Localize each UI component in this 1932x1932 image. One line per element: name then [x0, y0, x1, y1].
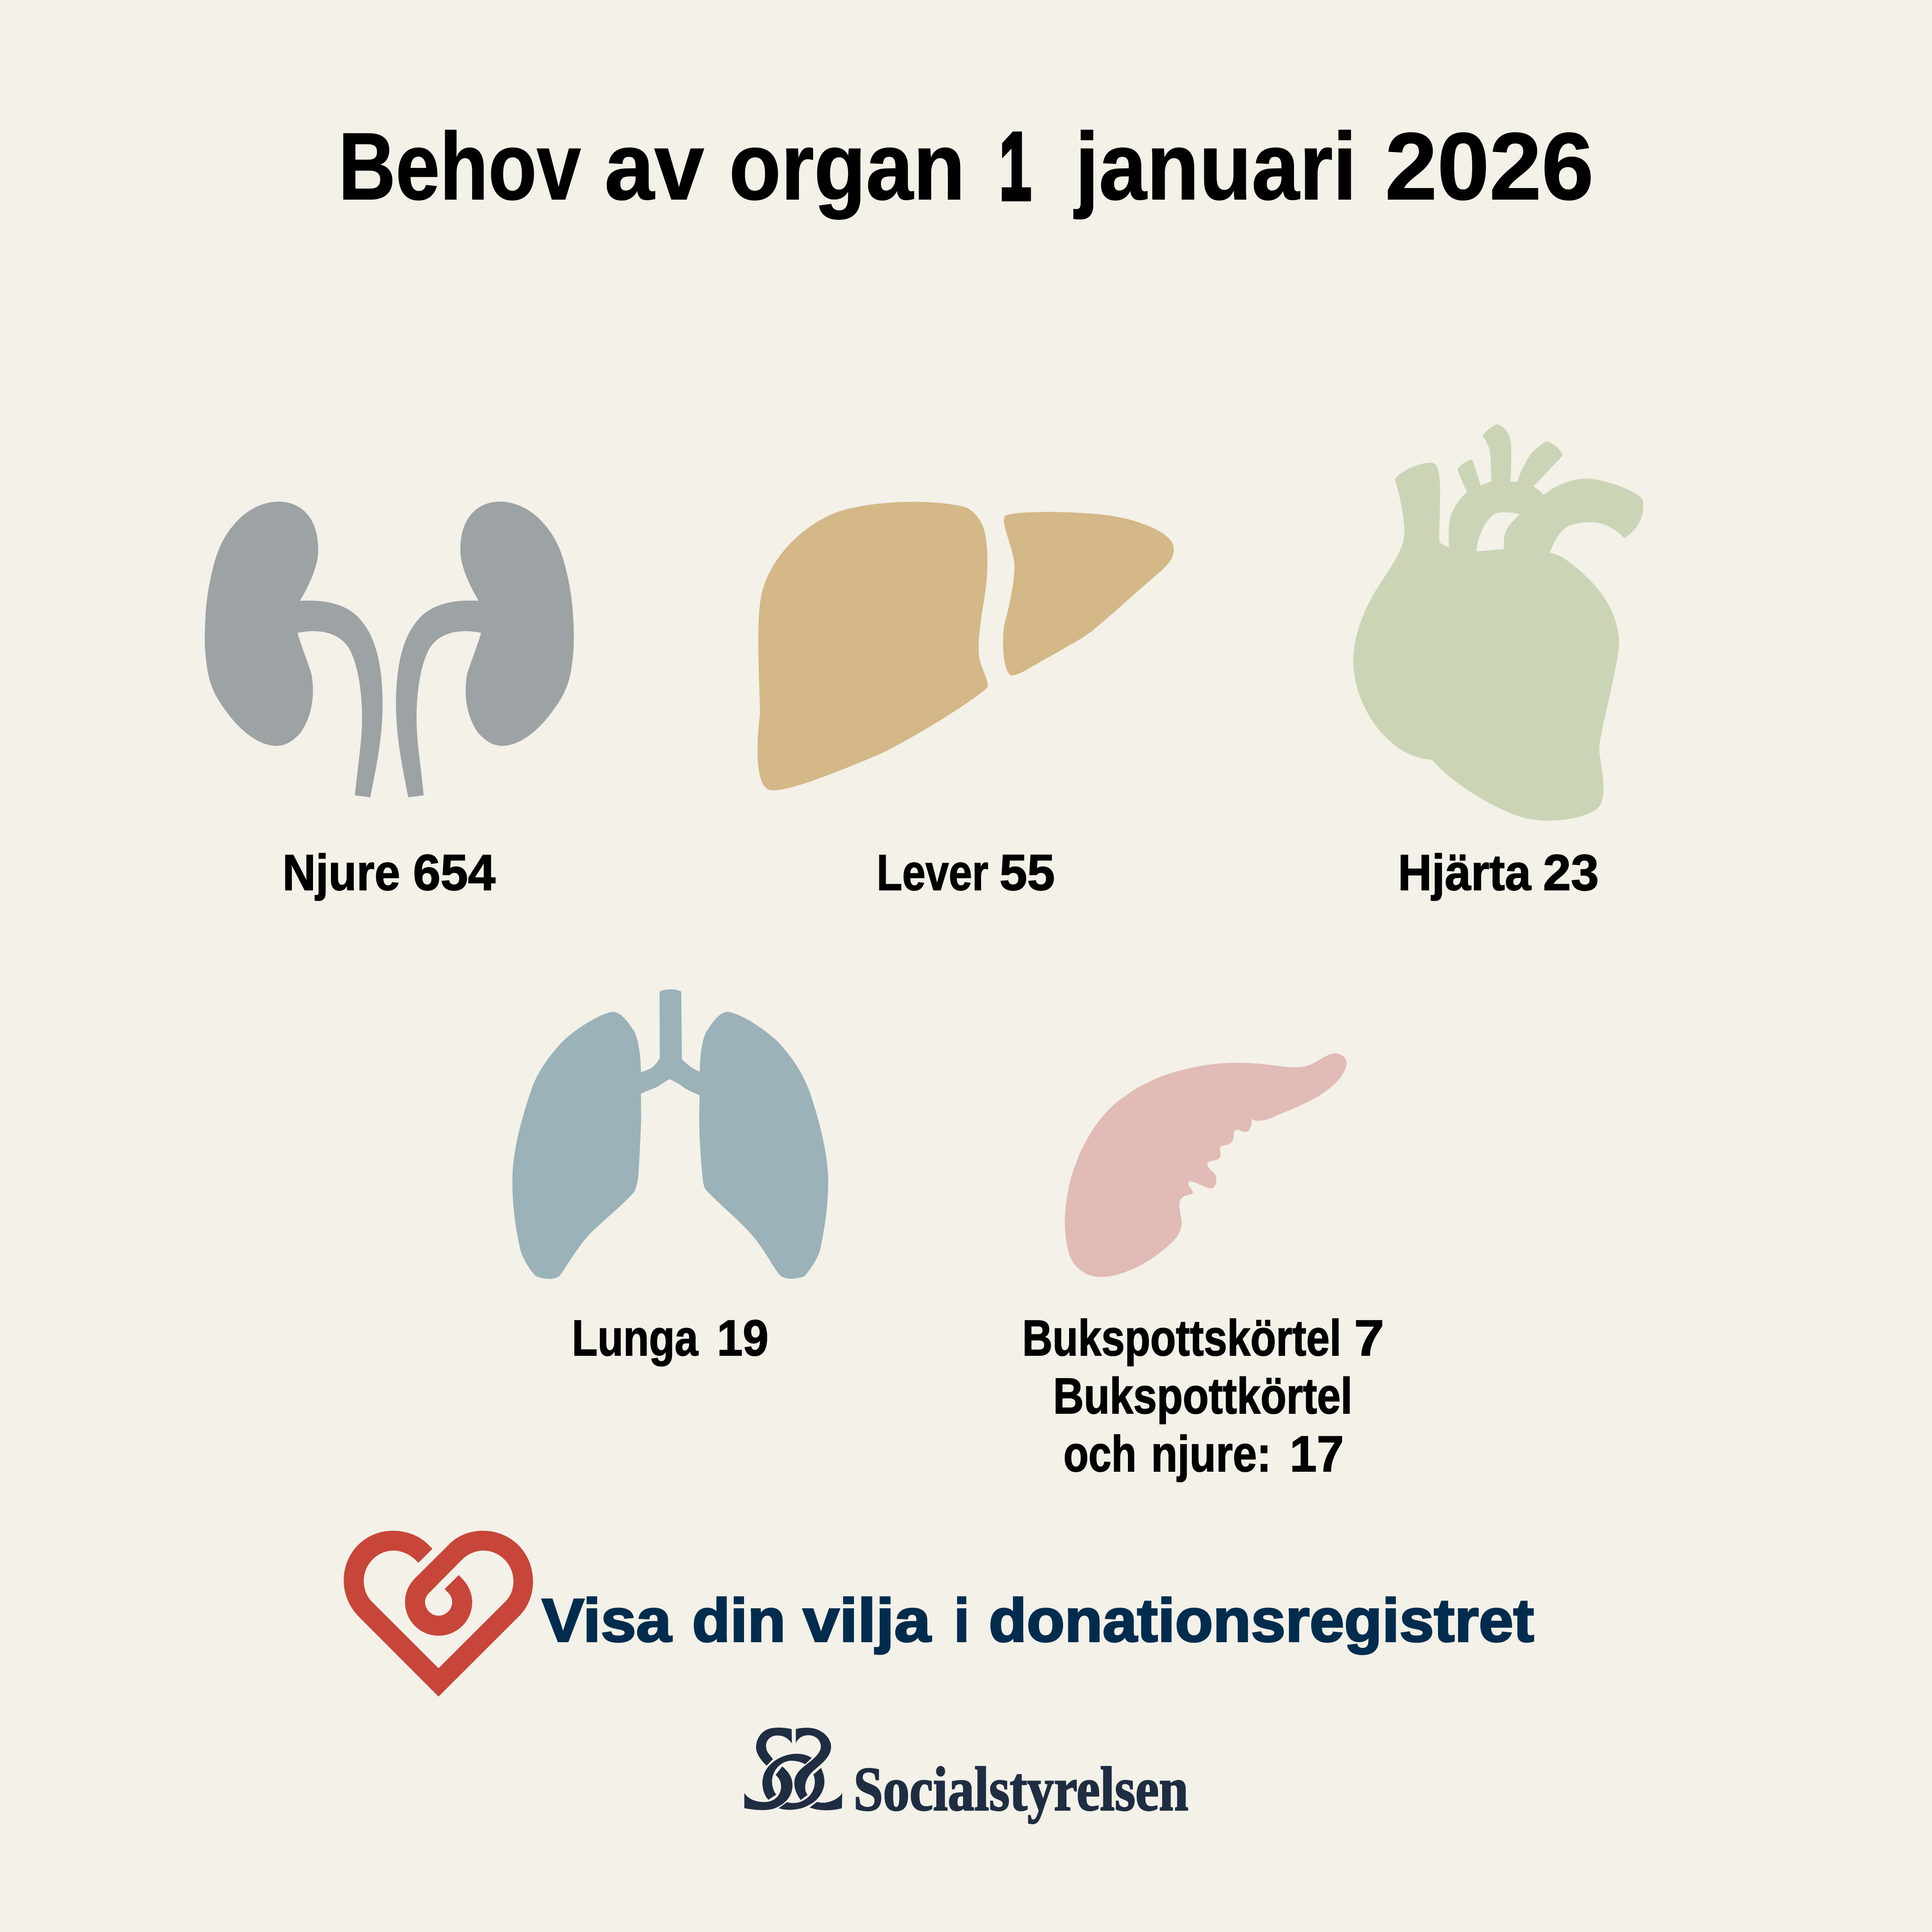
- title: organ: [729, 113, 965, 220]
- label: lung: Lunga: [572, 1310, 699, 1367]
- call to action: vilja: [803, 1586, 931, 1655]
- icon: heart organ: [1353, 424, 1643, 820]
- title: Behov: [338, 113, 581, 220]
- icon: kidneys: [205, 501, 574, 797]
- label: kidney: Njure: [283, 844, 400, 901]
- title: av: [605, 113, 704, 220]
- title: 2026: [1385, 113, 1594, 220]
- icon: Socialstyrelsen symbol: [744, 1728, 842, 1810]
- label: pancreas: och: [1063, 1426, 1136, 1482]
- label: liver: 55: [999, 844, 1055, 901]
- icon: pancreas: [1065, 1053, 1346, 1277]
- label: pancreas: Bukspottskörtel: [1022, 1310, 1341, 1367]
- label: pancreas: 17: [1290, 1426, 1344, 1482]
- label: pancreas: njure:: [1151, 1426, 1271, 1482]
- call to action: donationsregistret: [989, 1586, 1534, 1655]
- logo: Socialstyrelsen: [744, 1728, 1188, 1824]
- icon: lungs: [512, 989, 828, 1279]
- label: heart: 23: [1543, 844, 1599, 901]
- call to action: din: [692, 1586, 786, 1655]
- call to action: i: [954, 1586, 969, 1655]
- label: lung: 19: [717, 1310, 769, 1367]
- label: heart: Hjärta: [1398, 844, 1531, 901]
- label: pancreas: Bukspottkörtel: [1053, 1368, 1352, 1425]
- title: januari: [1073, 113, 1357, 220]
- label: pancreas: [1022, 1310, 1384, 1482]
- wordmark: Socialstyrelsen: [854, 1754, 1188, 1824]
- label: kidney: 654: [413, 844, 495, 901]
- call to action: Visa: [542, 1586, 672, 1655]
- label: liver: Lever: [877, 844, 988, 901]
- title: 1: [999, 113, 1031, 220]
- icon: liver: [757, 502, 1174, 790]
- icon: donation heart logo: [344, 1531, 533, 1697]
- label: pancreas: 7: [1354, 1310, 1384, 1367]
